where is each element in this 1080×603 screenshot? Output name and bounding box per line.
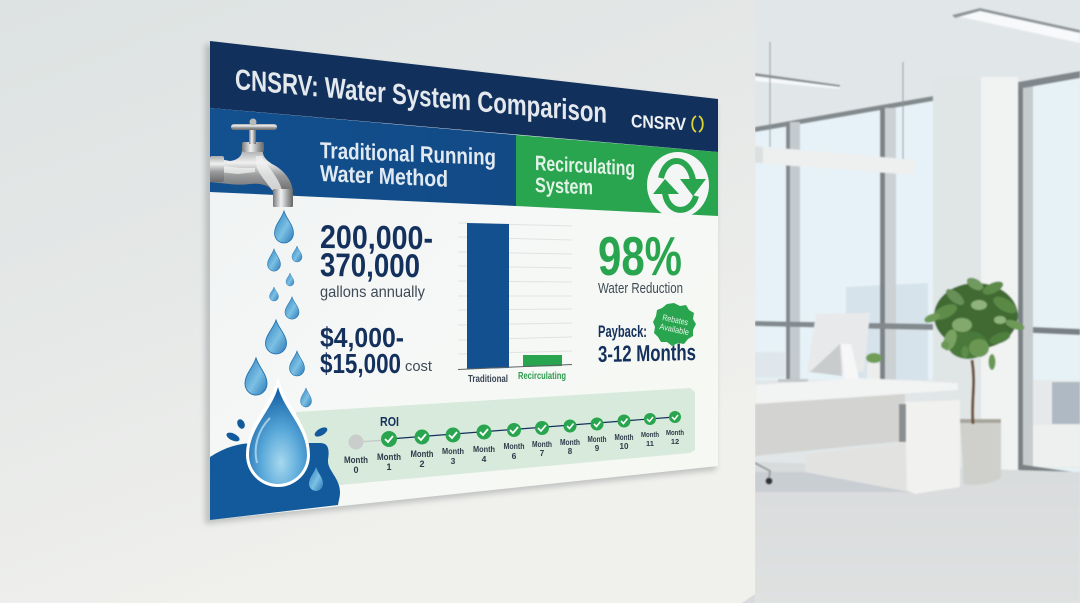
poster shadow [205, 44, 716, 524]
milestone: month 2: 2 [419, 459, 425, 469]
milestone: month 10: Month [614, 433, 634, 442]
ROI heading: ROI [380, 414, 399, 429]
panel: ROI background [296, 388, 695, 485]
milestone: month 12: 12 [671, 437, 679, 446]
ROI timeline [344, 411, 684, 475]
stat: gallons: 200,000- [320, 218, 433, 256]
milestone: month 3 [442, 428, 464, 466]
floor [755, 462, 1080, 603]
milestone: month 4: 4 [482, 454, 487, 464]
stat: water reduction: 98% [598, 225, 682, 287]
stat: water reduction [598, 225, 683, 297]
recirculating heading [535, 152, 635, 199]
milestone: month 7: 7 [540, 449, 545, 458]
stat: payback: 3-12 Months [598, 339, 696, 367]
milestone: month 0: Month [344, 455, 368, 465]
milestone: month 11: 11 [646, 439, 654, 448]
milestone: month 1: 1 [386, 462, 392, 472]
falling water drops [245, 211, 312, 407]
icon: small puddle drop [309, 467, 323, 491]
milestone: month 11 [641, 413, 659, 448]
milestone: month 3: 3 [451, 456, 456, 466]
desk [755, 378, 960, 494]
stat: cost: $4,000- [320, 322, 404, 353]
bar chart [458, 223, 572, 385]
milestone: month 6 [504, 423, 524, 461]
stat: payback [598, 322, 696, 367]
hanging lamp [755, 42, 915, 175]
traditional heading: Water Method [320, 160, 448, 192]
milestone: month 1: Month [377, 452, 401, 462]
milestone: month 0 [344, 434, 368, 475]
label: recirculating: Recirculating [518, 371, 566, 382]
traditional heading [320, 137, 496, 192]
windows: right bank [1018, 71, 1080, 478]
panel: traditional header [210, 108, 516, 206]
title: CNSRV: Water System Comparison [235, 64, 607, 130]
header band [210, 41, 718, 152]
milestone: month 0: 0 [353, 465, 359, 475]
icon: big water drop [246, 377, 310, 487]
milestone: month 10 [614, 414, 634, 451]
panel: recirculating header [516, 135, 718, 216]
logo: CNSRV [631, 111, 686, 134]
stat: gallons: gallons annually [320, 284, 425, 301]
poster [210, 41, 718, 520]
monitor [778, 313, 870, 383]
column [933, 77, 1018, 479]
milestone: month 9 [588, 418, 607, 453]
milestone: month 8: Month [560, 438, 580, 447]
bar: traditional [467, 223, 509, 369]
traditional heading: Traditional Running [320, 137, 496, 170]
milestone: month 6: Month [504, 441, 524, 451]
puddle [210, 418, 340, 520]
wall [0, 0, 755, 603]
label: traditional: Traditional [468, 374, 508, 385]
icon: faucet [210, 118, 293, 207]
badge: rebates available: Available [659, 321, 690, 337]
milestone: month 12 [666, 411, 684, 446]
badge: rebates available: Rebates [662, 312, 689, 327]
milestone: month 6: 6 [512, 451, 517, 461]
bar: recirculating [523, 355, 562, 367]
recirculating heading: System [535, 174, 593, 199]
stat: gallons: 370,000 [320, 246, 420, 284]
stat: payback: Payback: [598, 322, 647, 341]
milestone: month 11: Month [641, 430, 659, 439]
office background scene [755, 0, 1080, 603]
icon: recirculating arrows [647, 152, 709, 218]
milestone: month 4: Month [473, 444, 495, 454]
milestone: month 8 [560, 420, 580, 456]
logo ring [692, 116, 703, 132]
badge: rebates available [653, 303, 696, 346]
milestone: month 8: 8 [568, 447, 573, 456]
milestone: month 2 [410, 430, 434, 469]
potted plant [923, 275, 1026, 485]
milestone: month 3: Month [442, 446, 464, 456]
milestone: month 1 [377, 431, 401, 472]
milestone: month 4 [473, 424, 495, 464]
recirculating heading: Recirculating [535, 152, 635, 180]
stat: cost: cost [405, 358, 433, 375]
milestone: month 12: Month [666, 428, 684, 437]
milestone: month 10: 10 [620, 442, 629, 451]
milestone: month 7: Month [532, 440, 552, 449]
milestone: month 2: Month [410, 449, 434, 459]
stat: cost [320, 322, 433, 379]
poster paper [210, 41, 718, 520]
ceiling lights [755, 8, 1080, 89]
milestone: month 9: Month [588, 435, 607, 444]
stat: gallons [320, 218, 433, 301]
stat: cost: $15,000 [320, 348, 401, 379]
windows: left bank [755, 96, 933, 380]
milestone: month 7 [532, 421, 552, 458]
small desk plant [866, 353, 882, 383]
stat: water reduction: Water Reduction [598, 280, 683, 297]
milestone: month 9: 9 [595, 444, 600, 453]
